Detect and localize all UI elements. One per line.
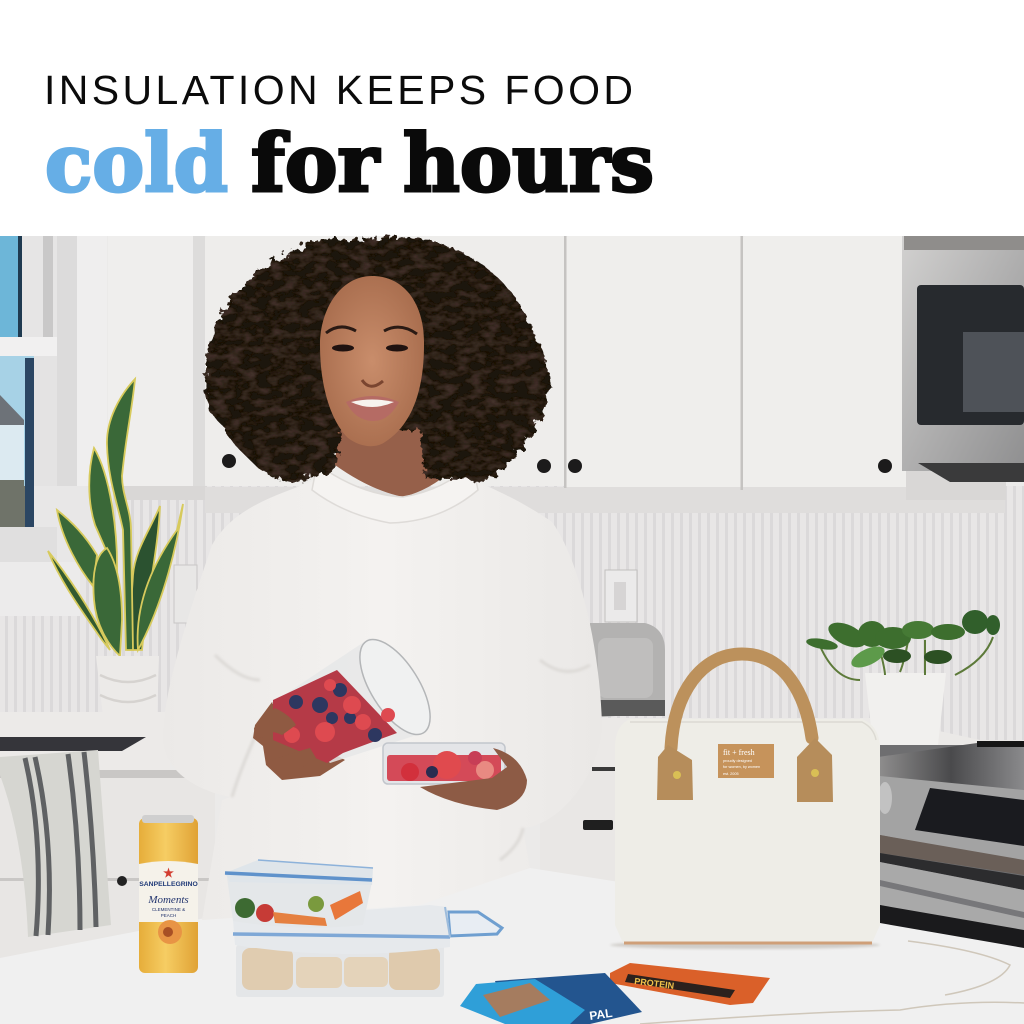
plant pot (865, 673, 946, 745)
heading line: cold for hours: cold (45, 116, 228, 210)
striped towel (0, 750, 111, 937)
face (320, 276, 424, 446)
front leaf (93, 548, 122, 656)
heading line: insulation keeps food: INSULATION KEEPS FOOD (44, 67, 633, 113)
marble counter top (0, 868, 1024, 1024)
left hand fingers (254, 708, 316, 778)
blue lid behind (448, 912, 502, 936)
back leaf (128, 506, 160, 650)
sparkling drink can: CLEMENTINE & (152, 907, 185, 912)
nose (362, 380, 383, 386)
tote label (718, 744, 774, 778)
upper container with vegetables (225, 860, 373, 928)
heading line: cold for hours: hours (403, 116, 654, 210)
backsplash (0, 486, 1024, 746)
tall container with berries (272, 628, 444, 763)
tote label: fit + fresh (723, 748, 755, 757)
berries (273, 670, 397, 763)
small berry container (383, 743, 505, 784)
snack pouches: PAL (588, 1006, 613, 1023)
lower container lid (233, 905, 450, 954)
pothos plant (805, 610, 1000, 745)
eyes (332, 344, 408, 352)
left hand (253, 702, 345, 780)
right counter (590, 718, 1024, 760)
right hand (420, 748, 527, 810)
toaster (590, 623, 665, 718)
smile (346, 396, 399, 421)
plant stems (820, 630, 993, 680)
wall (0, 236, 1024, 1024)
kitchen photo scene (0, 236, 1024, 1024)
protein bar (610, 963, 770, 1005)
sparkling drink can: Moments (147, 894, 189, 906)
sweater folds (215, 655, 590, 860)
upper cabinets (108, 236, 1006, 513)
neck (335, 420, 452, 497)
lower container with wraps (233, 905, 450, 997)
sweater collar (312, 463, 478, 523)
left counter and sink (0, 712, 215, 960)
leaf (89, 448, 117, 575)
snake plant (48, 379, 183, 719)
tote handle (671, 654, 812, 748)
sparkling drink can: PEACH (161, 913, 176, 918)
plant leaves (805, 610, 1000, 672)
woman (163, 237, 602, 920)
snack pouches (460, 973, 642, 1024)
sparkling drink can: SANPELLEGRINO (139, 881, 198, 888)
plant pot (96, 656, 159, 719)
tote label: est. 2005 (723, 772, 739, 776)
sweater (163, 478, 602, 920)
microwave (902, 236, 1024, 482)
stove (878, 741, 1024, 950)
heading line: cold for hours: for (251, 116, 380, 210)
eyebrows (326, 327, 417, 334)
handle tabs (657, 745, 693, 800)
hair (206, 237, 550, 482)
lunch containers (225, 860, 502, 997)
container rim (346, 628, 444, 746)
protein bar: PROTEIN (634, 976, 675, 991)
insulated lunch tote (610, 654, 880, 949)
left leaf (57, 510, 97, 586)
tote shadow (610, 941, 880, 949)
tote body (615, 719, 880, 943)
tote label: proudly designed (723, 759, 752, 763)
right lower cabinet (540, 720, 632, 882)
window (0, 236, 107, 566)
page background (0, 0, 1024, 236)
tall leaf (107, 379, 135, 650)
heading line: cold for hours (45, 116, 654, 210)
right leaf (138, 504, 183, 650)
sparkling drink can (139, 815, 198, 973)
cabinet knobs (222, 454, 892, 473)
title (44, 67, 654, 210)
container body (272, 638, 423, 763)
wall outlets (174, 565, 637, 623)
sparkling drink can: ★ (163, 866, 174, 880)
tote label: for women, by women (723, 765, 760, 769)
far left leaf (48, 551, 110, 650)
